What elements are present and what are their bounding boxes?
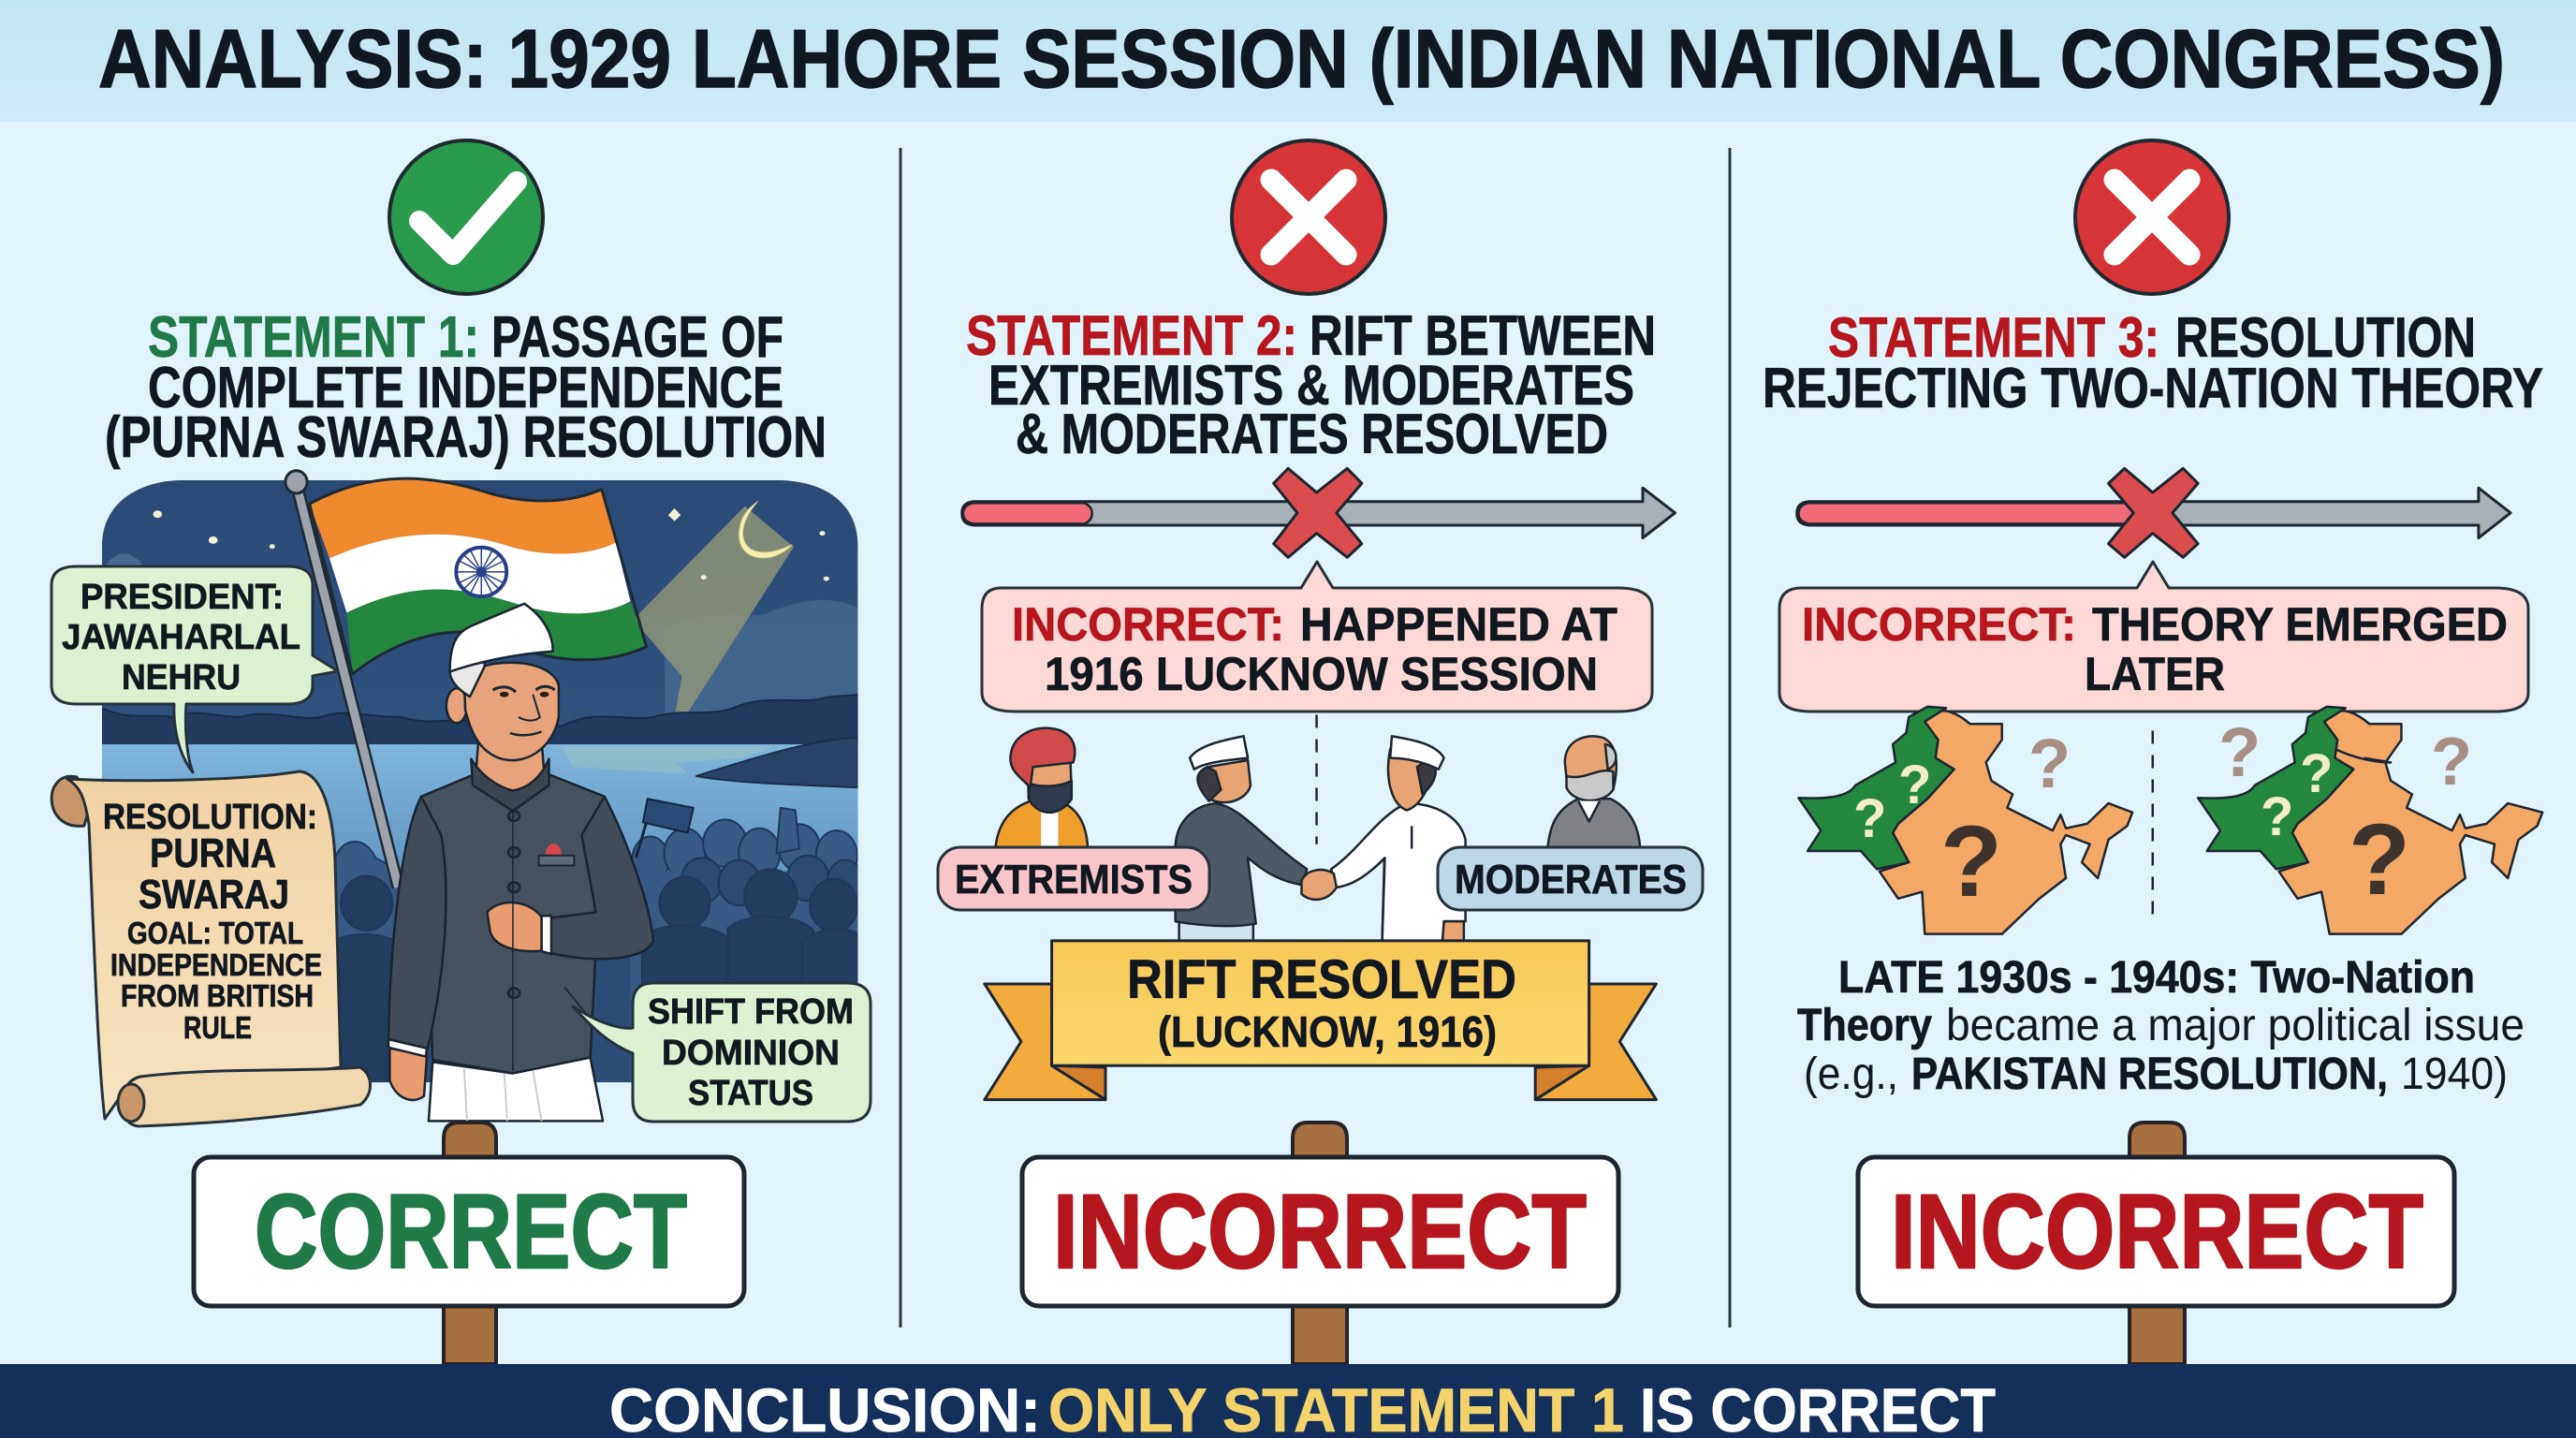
timeline with cross bbox=[1797, 468, 2510, 557]
question marks: ? bbox=[2261, 786, 2293, 847]
question marks bbox=[1853, 713, 2472, 917]
note: two-nation theory timing: 1940) bbox=[2401, 1049, 2508, 1099]
heading: statement 2: & MODERATES RESOLVED bbox=[1016, 403, 1608, 465]
callout: theory emerged later: INCORRECT: bbox=[1802, 598, 2076, 651]
note: two-nation theory timing: PAKISTAN RESOLUTION, bbox=[1911, 1049, 2388, 1099]
scroll: resolution purna swaraj bbox=[51, 771, 371, 1126]
Nehru figure bbox=[388, 604, 653, 1121]
night sky and lake bbox=[102, 480, 864, 1085]
scroll: resolution purna swaraj: PURNA bbox=[150, 830, 276, 876]
callout: shift from dominion bbox=[573, 983, 871, 1122]
note: two-nation theory timing: Theory bbox=[1797, 1001, 1932, 1050]
question marks: ? bbox=[2300, 743, 2333, 804]
scroll: resolution purna swaraj: RULE bbox=[183, 1010, 252, 1045]
panel: statement 2 bbox=[938, 140, 1703, 1364]
label: moderates: MODERATES bbox=[1455, 857, 1687, 902]
verdict sign: incorrect bbox=[1022, 1123, 1618, 1364]
Indian flag bbox=[310, 478, 647, 674]
heading: statement 2 bbox=[966, 304, 1656, 465]
callout: incorrect lucknow: 1916 LUCKNOW SESSION bbox=[1045, 648, 1598, 700]
verdict sign: incorrect bbox=[1858, 1123, 2454, 1364]
heading: statement 1: (PURNA SWARAJ) RESOLUTION bbox=[105, 405, 827, 470]
heading: statement 2: RIFT BETWEEN bbox=[1310, 304, 1656, 367]
question marks: ? bbox=[1853, 788, 1886, 849]
scroll: resolution purna swaraj: FROM BRITISH bbox=[121, 978, 314, 1013]
note: two-nation theory timing bbox=[1797, 953, 2525, 1099]
maps: India and Pakistan bbox=[1798, 707, 2542, 934]
stars bbox=[153, 508, 829, 581]
callout: incorrect lucknow bbox=[982, 562, 1652, 712]
icon: red cross bbox=[1232, 140, 1385, 294]
verdict sign: incorrect: INCORRECT bbox=[1891, 1173, 2423, 1290]
note: two-nation theory timing: became a major political issue bbox=[1946, 1001, 2525, 1050]
note: two-nation theory timing: LATE 1930s - 1940s: Two-Nation bbox=[1838, 953, 2475, 1003]
question marks: ? bbox=[2028, 725, 2071, 802]
heading: statement 3: STATEMENT 3: bbox=[1828, 306, 2159, 369]
ribbon banner: rift resolved bbox=[985, 941, 1656, 1100]
heading: statement 3: RESOLUTION bbox=[2175, 306, 2476, 369]
label: extremists: EXTREMISTS bbox=[955, 857, 1193, 902]
callout: shift from dominion: DOMINION bbox=[662, 1034, 840, 1073]
icon: red cross bbox=[2075, 140, 2229, 294]
heading: statement 2: EXTREMISTS & MODERATES bbox=[988, 354, 1634, 417]
callout: president: NEHRU bbox=[122, 658, 241, 697]
ribbon banner: rift resolved: (LUCKNOW, 1916) bbox=[1158, 1007, 1497, 1056]
label: moderates bbox=[1438, 847, 1703, 910]
callout: theory emerged later: THEORY EMERGED bbox=[2092, 598, 2508, 651]
callout: theory emerged later: LATER bbox=[2085, 648, 2225, 700]
shaking figures bbox=[1176, 736, 1466, 942]
heading: statement 3 bbox=[1763, 306, 2543, 419]
scroll: resolution purna swaraj: GOAL: TOTAL bbox=[127, 916, 303, 950]
illustration: night scene with Nehru and flag bbox=[102, 471, 864, 1121]
heading: statement 2: STATEMENT 2: bbox=[966, 304, 1297, 367]
question marks: ? bbox=[2218, 713, 2261, 791]
timeline with cross bbox=[962, 468, 1675, 557]
question marks: ? bbox=[2349, 802, 2410, 916]
turbaned extremist bbox=[995, 728, 1088, 849]
scroll: resolution purna swaraj: RESOLUTION: bbox=[103, 798, 317, 837]
question marks: ? bbox=[1898, 755, 1931, 815]
question marks: ? bbox=[1940, 804, 2002, 917]
map left bbox=[1798, 707, 2132, 934]
conclusion bar bbox=[0, 1364, 2576, 1438]
scroll: resolution purna swaraj: INDEPENDENCE bbox=[110, 947, 322, 982]
verdict sign: incorrect: INCORRECT bbox=[1053, 1173, 1587, 1290]
heading: statement 1: STATEMENT 1: bbox=[148, 305, 479, 370]
elder moderate bbox=[1547, 736, 1640, 849]
illustration: extremists and moderates handshake bbox=[995, 715, 1640, 942]
flagpole bbox=[285, 471, 398, 888]
callout: shift from dominion: STATUS bbox=[688, 1074, 813, 1113]
question marks: ? bbox=[2431, 725, 2472, 800]
panel: statement 3 bbox=[1763, 140, 2543, 1364]
heading: statement 1: COMPLETE INDEPENDENCE bbox=[148, 356, 783, 420]
panel: statement 1 bbox=[51, 140, 871, 1364]
icon: green check bbox=[389, 140, 543, 294]
callout: theory emerged later bbox=[1779, 562, 2528, 712]
callout: incorrect lucknow: INCORRECT: bbox=[1012, 598, 1284, 651]
callout: president: JAWAHARLAL bbox=[62, 618, 300, 657]
scroll: resolution purna swaraj: SWARAJ bbox=[139, 872, 289, 917]
verdict sign: correct: CORRECT bbox=[255, 1173, 687, 1290]
verdict sign: correct bbox=[194, 1123, 744, 1364]
ribbon banner: rift resolved: RIFT RESOLVED bbox=[1127, 949, 1516, 1010]
callout: president: PRESIDENT: bbox=[80, 578, 284, 617]
callout: incorrect lucknow: HAPPENED AT bbox=[1300, 598, 1617, 651]
callout: president bbox=[51, 566, 338, 772]
note: two-nation theory timing: (e.g., bbox=[1804, 1049, 1898, 1099]
moon bbox=[739, 502, 792, 558]
heading: statement 1 bbox=[105, 305, 827, 470]
crowd bbox=[329, 808, 864, 1085]
map right bbox=[2198, 707, 2542, 934]
heading: statement 1: PASSAGE OF bbox=[491, 305, 783, 370]
callout: shift from dominion: SHIFT FROM bbox=[648, 992, 854, 1032]
column dividers bbox=[900, 148, 1730, 1328]
label: extremists bbox=[938, 847, 1209, 910]
